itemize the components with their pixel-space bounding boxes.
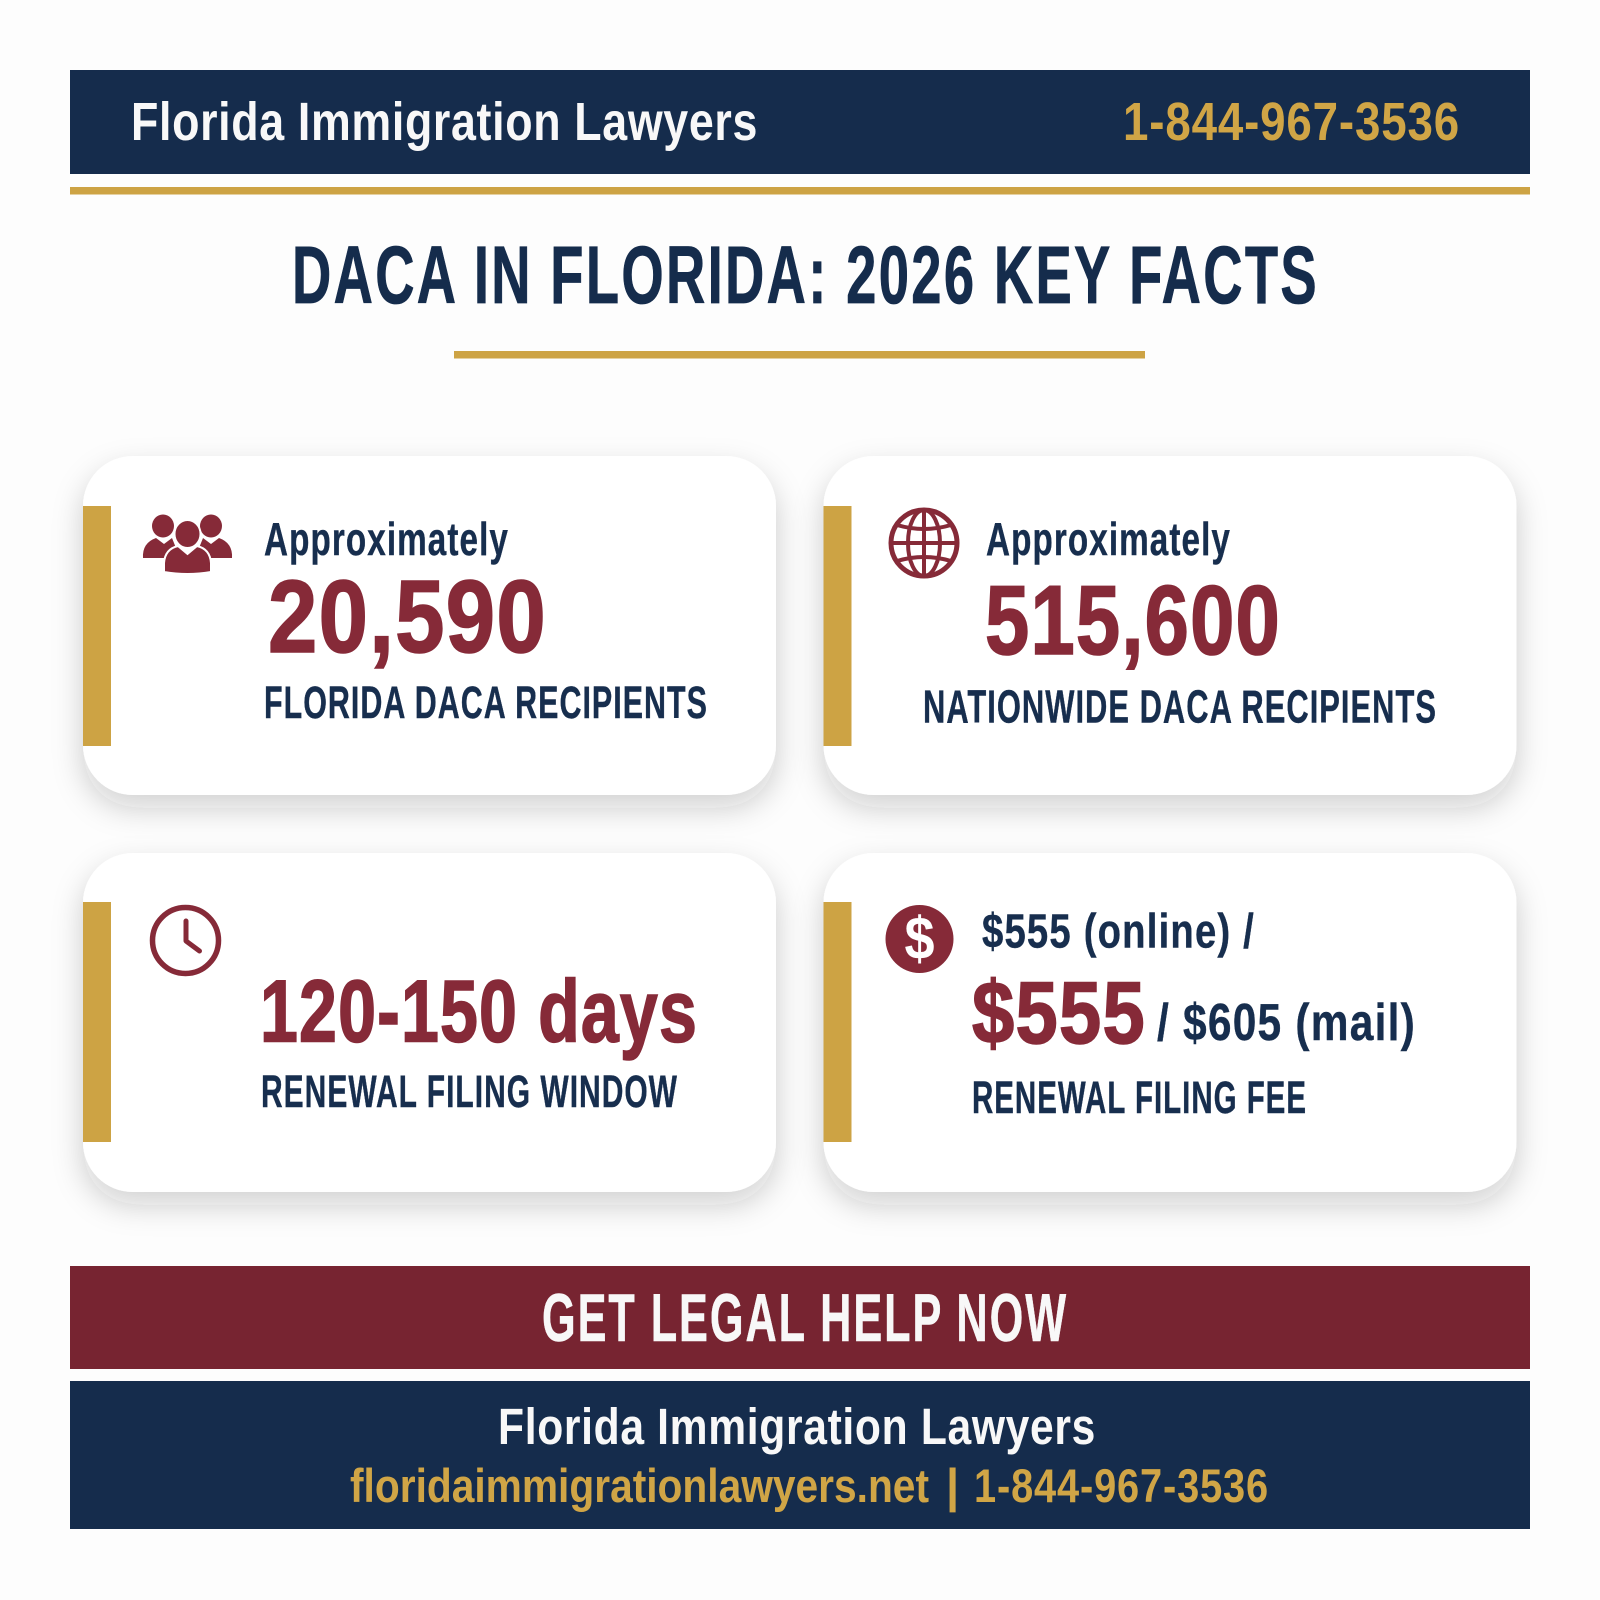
icon: globe xyxy=(891,510,957,576)
value: 120-150 days xyxy=(260,962,698,1060)
accent bar xyxy=(83,506,111,746)
icon: dollar xyxy=(886,905,954,973)
phone number: 1-844-967-3536 xyxy=(1123,92,1460,152)
footer phone: 1-844-967-3536 xyxy=(974,1459,1269,1512)
panel: renewal fee xyxy=(824,853,1516,1192)
description: RENEWAL FILING FEE xyxy=(972,1072,1307,1123)
approximately label: Approximately xyxy=(264,513,509,565)
panel: nationwide recipients xyxy=(824,456,1516,795)
icon: clock xyxy=(152,908,218,974)
banner text: GET LEGAL HELP NOW xyxy=(542,1280,1068,1356)
accent bar xyxy=(83,902,111,1142)
footer website: floridaimmigrationlawyers.net xyxy=(350,1459,929,1512)
panel: renewal window xyxy=(83,853,776,1192)
header bar xyxy=(70,70,1530,174)
footer bar xyxy=(70,1381,1530,1529)
header gold rule xyxy=(70,187,1530,194)
description: RENEWAL FILING WINDOW xyxy=(261,1066,678,1117)
firm name: Florida Immigration Lawyers xyxy=(131,92,758,152)
panel: Florida recipients xyxy=(83,456,776,795)
accent bar xyxy=(824,902,852,1142)
call to action banner xyxy=(70,1266,1530,1369)
mail fee: / $605 (mail) xyxy=(1157,994,1416,1052)
accent bar xyxy=(824,506,852,746)
description: FLORIDA DACA RECIPIENTS xyxy=(264,677,708,728)
online fee: $555 (online) / xyxy=(982,906,1255,958)
title underline xyxy=(454,351,1145,358)
value: $555 xyxy=(972,963,1146,1062)
footer separator: | xyxy=(946,1459,959,1512)
icon: people xyxy=(143,514,232,574)
icon: dollar: $ xyxy=(904,905,934,972)
approximately label: Approximately xyxy=(986,513,1231,565)
value: 20,590 xyxy=(268,559,547,674)
footer firm name: Florida Immigration Lawyers xyxy=(498,1398,1096,1455)
value: 515,600 xyxy=(985,565,1281,675)
